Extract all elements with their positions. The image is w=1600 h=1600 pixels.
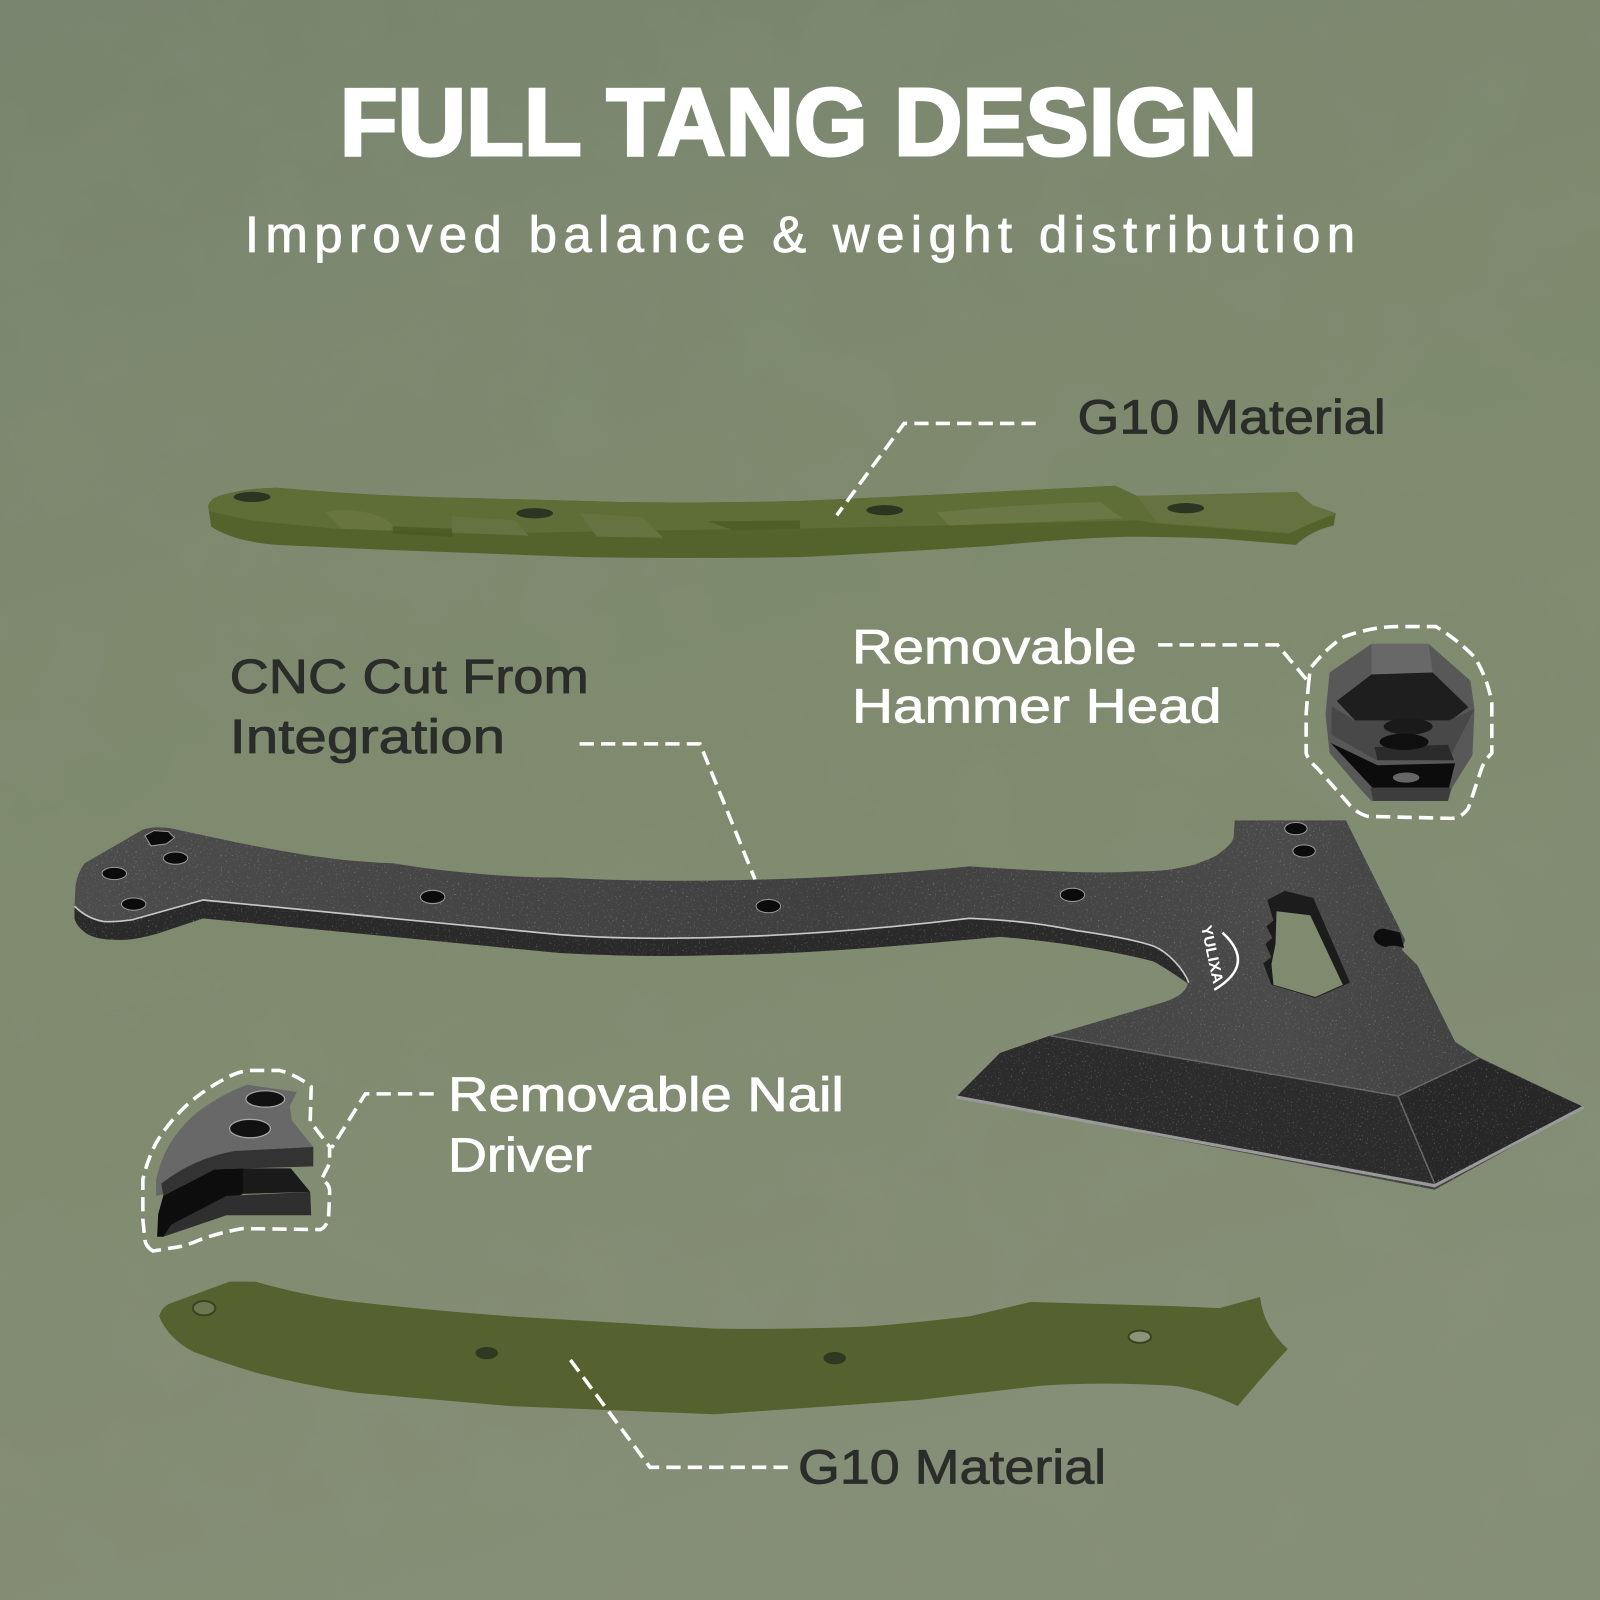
bottom G10 handle scale bbox=[159, 1282, 1288, 1414]
handle grip recesses bbox=[326, 510, 393, 531]
window cutout bbox=[1263, 891, 1350, 998]
handle holes bbox=[234, 492, 270, 502]
callout line: G10 bottom bbox=[568, 1357, 788, 1467]
label: G10 material top: G10 Material bbox=[1078, 392, 1386, 445]
label: CNC cut bbox=[230, 651, 589, 764]
tang edge thickness bbox=[74, 900, 1189, 983]
label: CNC cut: CNC Cut From bbox=[230, 651, 589, 704]
dashed outline: hammer head bbox=[1306, 627, 1492, 818]
label: removable nail driver: Removable Nail bbox=[448, 1069, 844, 1122]
handle holes bbox=[193, 1301, 215, 1315]
main axe tang bbox=[61, 816, 1592, 1194]
handle body bbox=[159, 1282, 1288, 1414]
callout line: CNC bbox=[580, 744, 755, 880]
callout line: nail driver bbox=[332, 1094, 434, 1148]
speckle texture bbox=[61, 816, 1592, 1194]
callout line: hammer head bbox=[1158, 645, 1308, 682]
handle silhouette bbox=[208, 486, 1336, 558]
tang silhouette bbox=[74, 820, 1584, 1190]
label: removable nail driver: Driver bbox=[448, 1129, 592, 1182]
handle top face bbox=[208, 486, 1336, 534]
bottle opener notch bbox=[1373, 929, 1404, 948]
dashed outline: nail driver bbox=[143, 1070, 330, 1251]
label: removable hammer head bbox=[852, 621, 1221, 733]
logo bbox=[1197, 924, 1238, 990]
top G10 handle scale bbox=[208, 486, 1336, 558]
icon: nail driver bbox=[156, 1085, 313, 1237]
title: FULL TANG DESIGN bbox=[340, 69, 1257, 176]
subtitle: Improved balance & weight distribution bbox=[245, 206, 1355, 263]
label: G10 material bottom: G10 Material bbox=[798, 1442, 1106, 1495]
label: removable hammer head: Hammer Head bbox=[852, 680, 1221, 733]
callout line: G10 top bbox=[837, 423, 1036, 515]
logo: YULIXA bbox=[1197, 924, 1226, 985]
blade bevel bbox=[956, 1036, 1435, 1184]
mounting holes bbox=[102, 822, 1315, 913]
label: CNC cut: Integration bbox=[230, 711, 505, 764]
label: removable hammer head: Removable bbox=[852, 621, 1137, 674]
label: removable nail driver bbox=[448, 1069, 844, 1182]
icon: hammer head bbox=[1326, 644, 1474, 801]
